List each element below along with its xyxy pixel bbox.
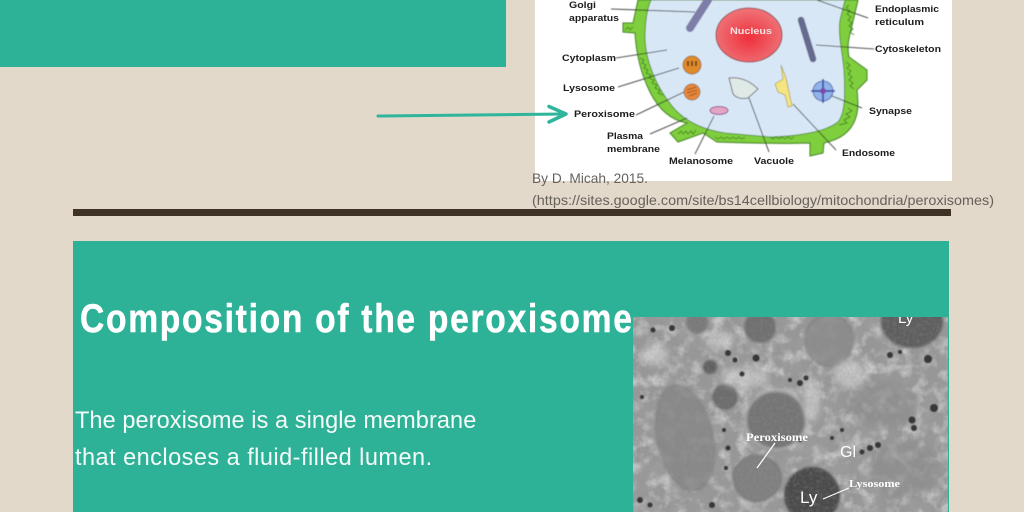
lysosome — [683, 56, 701, 74]
cytoskeleton — [801, 20, 813, 59]
diagram labels: Plasma — [607, 131, 644, 142]
bottom teal panel — [73, 241, 949, 512]
micrograph labels: Gl — [840, 444, 856, 461]
micrograph labels: Ly — [898, 310, 914, 327]
body text: that encloses a fluid-filled lumen. — [75, 444, 432, 471]
cytoplasm — [645, 0, 845, 137]
synapse — [811, 79, 835, 103]
diagram labels: Endoplasmic — [875, 4, 940, 15]
leader lines — [611, 0, 874, 154]
diagram labels: apparatus — [569, 13, 619, 24]
diagram labels: Cytoplasm — [562, 53, 616, 64]
image credit: (https://sites.google.com/site/bs14cellbiology/mitochondria/peroxisomes) — [532, 192, 994, 208]
electron micrograph — [633, 296, 948, 512]
diagram labels: Golgi — [569, 0, 596, 11]
endosome — [775, 65, 792, 107]
peroxisome — [684, 84, 700, 100]
dark granule clusters — [637, 325, 938, 508]
cell membrane — [623, 0, 867, 156]
top-left teal panel — [0, 0, 506, 67]
micrograph labels: Peroxisome — [746, 432, 808, 444]
golgi apparatus — [690, 0, 708, 28]
diagram labels: Melanosome — [669, 156, 733, 167]
vacuole — [729, 78, 758, 98]
cell diagram image — [535, 0, 952, 181]
diagram labels: Cytoskeleton — [875, 44, 941, 55]
micrograph labels: Ly — [800, 488, 818, 507]
diagram labels: Lysosome — [563, 83, 615, 94]
heading: Composition of the peroxisome — [80, 296, 632, 341]
micrograph labels — [746, 310, 914, 507]
melanosome — [710, 106, 728, 114]
diagram labels: Vacuole — [754, 156, 794, 167]
membrane squiggles — [625, 5, 854, 139]
micrograph labels: Lysosome — [849, 478, 900, 490]
body text: The peroxisome is a single membrane — [75, 407, 476, 434]
diagram labels: reticulum — [875, 17, 924, 28]
nucleus — [716, 8, 782, 62]
diagram labels: Nucleus — [730, 26, 772, 37]
image credit — [532, 170, 994, 208]
diagram labels: Endosome — [842, 148, 895, 159]
diagram labels — [562, 0, 941, 167]
diagram labels: Synapse — [869, 106, 912, 117]
image credit: By D. Micah, 2015. — [532, 170, 648, 186]
diagram labels: Peroxisome — [574, 109, 635, 120]
arrow pointing to peroxisome — [378, 106, 566, 122]
divider bar — [73, 209, 951, 216]
organelles — [654, 317, 944, 512]
body text — [75, 407, 476, 471]
diagram labels: membrane — [607, 144, 660, 155]
